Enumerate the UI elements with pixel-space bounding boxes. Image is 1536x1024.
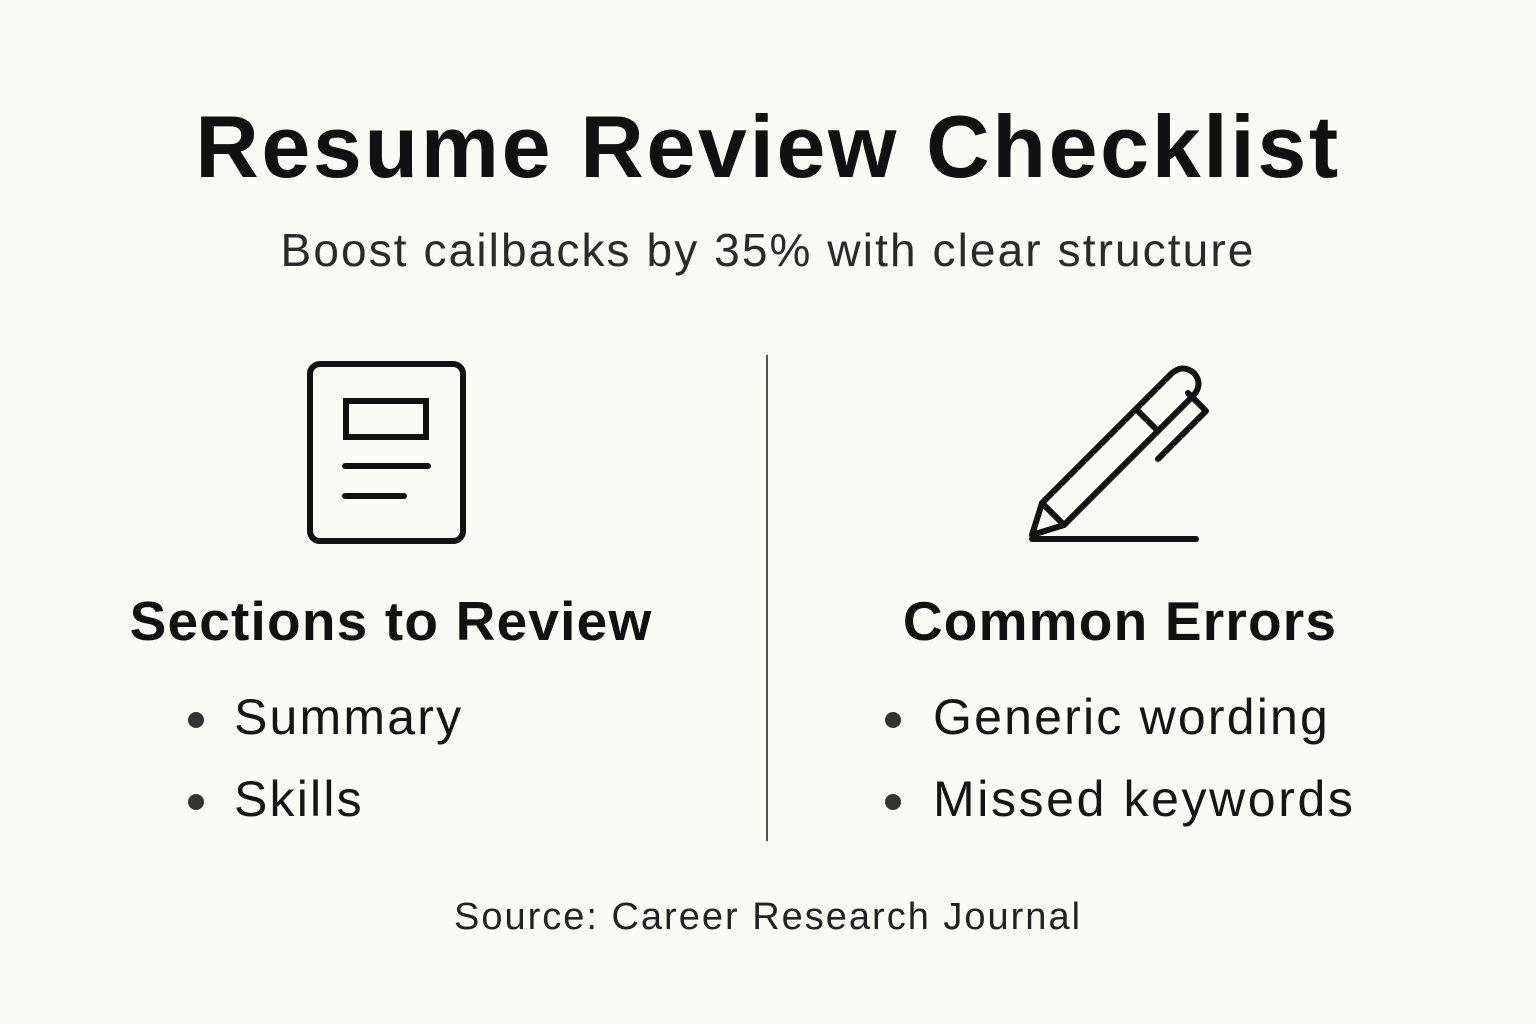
- panel: common errors: [885, 366, 1355, 827]
- subtitle: Boost cailbacks by 35% with clear structure: [281, 224, 1255, 276]
- item: summary: Summary: [234, 689, 463, 745]
- list: sections: [188, 689, 463, 827]
- panel: sections to review: [130, 361, 652, 827]
- list: errors: [885, 689, 1355, 827]
- item: missed keywords: Missed keywords: [933, 771, 1355, 827]
- source note: Source: Career Research Journal: [454, 896, 1082, 938]
- divider: [766, 355, 768, 841]
- heading: sections to review: Sections to Review: [130, 590, 652, 652]
- icon: pen: [1029, 366, 1209, 542]
- item: skills: Skills: [234, 771, 364, 827]
- title: Resume Review Checklist: [195, 97, 1341, 196]
- icon: document: [307, 361, 466, 544]
- item: generic wording: Generic wording: [933, 689, 1330, 745]
- heading: common errors: Common Errors: [903, 590, 1337, 652]
